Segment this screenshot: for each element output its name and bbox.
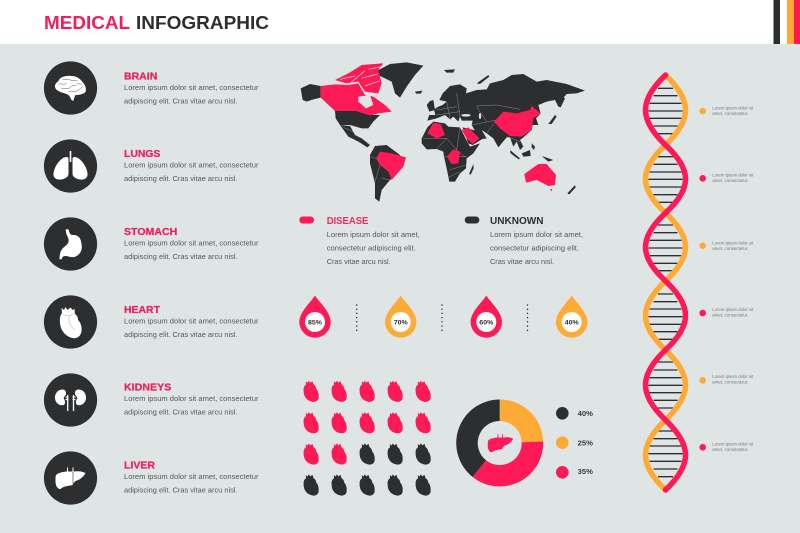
DNA notes: amet, consectetur.	[712, 447, 748, 452]
drop: 70%: 70%	[394, 319, 408, 326]
DNA notes: Lorem ipsum dolor sit	[712, 374, 754, 379]
label: lungs	[124, 149, 259, 183]
world map	[301, 62, 585, 202]
DNA notes: Lorem ipsum dolor sit	[712, 106, 754, 110]
organ: brain	[44, 61, 259, 115]
drop: 85%: 85%	[308, 319, 322, 326]
donut legend: 35%	[578, 467, 593, 476]
DNA notes: amet, consectetur.	[712, 246, 748, 251]
label: kidneys: adipiscing elit. Cras vitae arcu nisl.	[124, 408, 238, 416]
donut chart	[456, 400, 543, 486]
DNA notes: Lorem ipsum dolor sit	[712, 240, 754, 246]
header bar	[0, 0, 800, 44]
title: INFOGRAPHIC	[136, 12, 269, 33]
DNA notes: amet, consectetur.	[712, 111, 748, 116]
colour stripes	[774, 0, 800, 44]
icon: kidneys	[44, 373, 97, 427]
label: kidneys	[124, 382, 259, 416]
label: lungs: adipiscing elit. Cras vitae arcu nisl.	[124, 174, 238, 183]
pictogram: hearts grid	[304, 381, 431, 496]
panel: organs list	[44, 61, 259, 505]
label: brain	[124, 71, 259, 105]
label: heart: Lorem ipsum dolor sit amet, consectetur	[124, 316, 259, 326]
drop: 85%	[299, 296, 331, 338]
organ: stomach	[44, 217, 259, 271]
label: kidneys: KIDNEYS	[124, 382, 172, 394]
drop: 60%	[471, 296, 502, 338]
label: liver: adipiscing elit. Cras vitae arcu nisl.	[124, 485, 238, 494]
legend: unknown	[465, 216, 583, 266]
legend: disease: Cras vitae arcu nisl.	[327, 257, 391, 266]
organ: liver	[44, 451, 259, 505]
legend: unknown: UNKNOWN	[490, 216, 544, 227]
title: MEDICAL	[44, 12, 130, 33]
drop: 70%	[385, 296, 416, 338]
label: heart: adipiscing elit. Cras vitae arcu nisl.	[124, 330, 238, 339]
donut legend: 25%	[578, 438, 593, 447]
icon: heart	[44, 295, 97, 349]
drop: 40%	[556, 296, 587, 338]
label: brain: BRAIN	[124, 71, 157, 82]
DNA notes: Lorem ipsum dolor sit	[712, 172, 754, 178]
legend: disease: DISEASE	[327, 216, 369, 227]
donut legend	[556, 407, 593, 479]
legend: unknown: Cras vitae arcu nisl.	[490, 257, 554, 266]
drop: 40%: 40%	[565, 319, 579, 326]
icon: liver	[44, 451, 97, 505]
DNA notes	[699, 106, 754, 452]
label: stomach	[124, 227, 259, 261]
icon: brain	[44, 61, 97, 115]
label: kidneys: Lorem ipsum dolor sit amet, consectetur	[124, 394, 259, 403]
label: liver: LIVER	[124, 460, 156, 471]
legend: disease: consectetur adipiscing elit.	[327, 244, 416, 252]
label: stomach: STOMACH	[124, 227, 177, 238]
percentage drops	[299, 296, 587, 338]
label: brain: adipiscing elit. Cras vitae arcu nisl.	[124, 96, 238, 105]
label: lungs: Lorem ipsum dolor sit amet, consectetur	[124, 161, 259, 170]
organ: lungs	[44, 139, 259, 193]
label: brain: Lorem ipsum dolor sit amet, consectetur	[124, 83, 259, 92]
title	[44, 12, 269, 33]
legend: unknown: Lorem ipsum dolor sit amet,	[490, 230, 583, 239]
donut legend: 40%	[578, 409, 593, 418]
organ: kidneys	[44, 373, 259, 427]
label: liver: Lorem ipsum dolor sit amet, consectetur	[124, 472, 259, 481]
DNA notes: amet, consectetur.	[712, 380, 748, 384]
legend: disease	[299, 216, 420, 266]
organ: heart	[44, 295, 259, 349]
label: heart: HEART	[124, 305, 160, 316]
drop: 60%: 60%	[479, 319, 493, 326]
label: lungs: LUNGS	[124, 149, 161, 160]
icon: liver	[488, 434, 513, 452]
DNA helix	[645, 75, 686, 490]
icon: lungs	[44, 139, 97, 193]
label: stomach: Lorem ipsum dolor sit amet, consectetur	[124, 239, 259, 248]
label: liver	[124, 460, 259, 494]
DNA notes: Lorem ipsum dolor sit	[712, 442, 754, 446]
DNA notes: amet, consectetur.	[712, 312, 748, 318]
icon: stomach	[44, 217, 97, 271]
DNA notes: amet, consectetur.	[712, 178, 748, 183]
label: stomach: adipiscing elit. Cras vitae arcu nisl.	[124, 252, 238, 261]
DNA notes: Lorem ipsum dolor sit	[712, 307, 754, 312]
legend: unknown: consectetur adipiscing elit.	[490, 244, 579, 252]
legend: disease: Lorem ipsum dolor sit amet,	[327, 230, 420, 239]
label: heart	[124, 305, 259, 339]
